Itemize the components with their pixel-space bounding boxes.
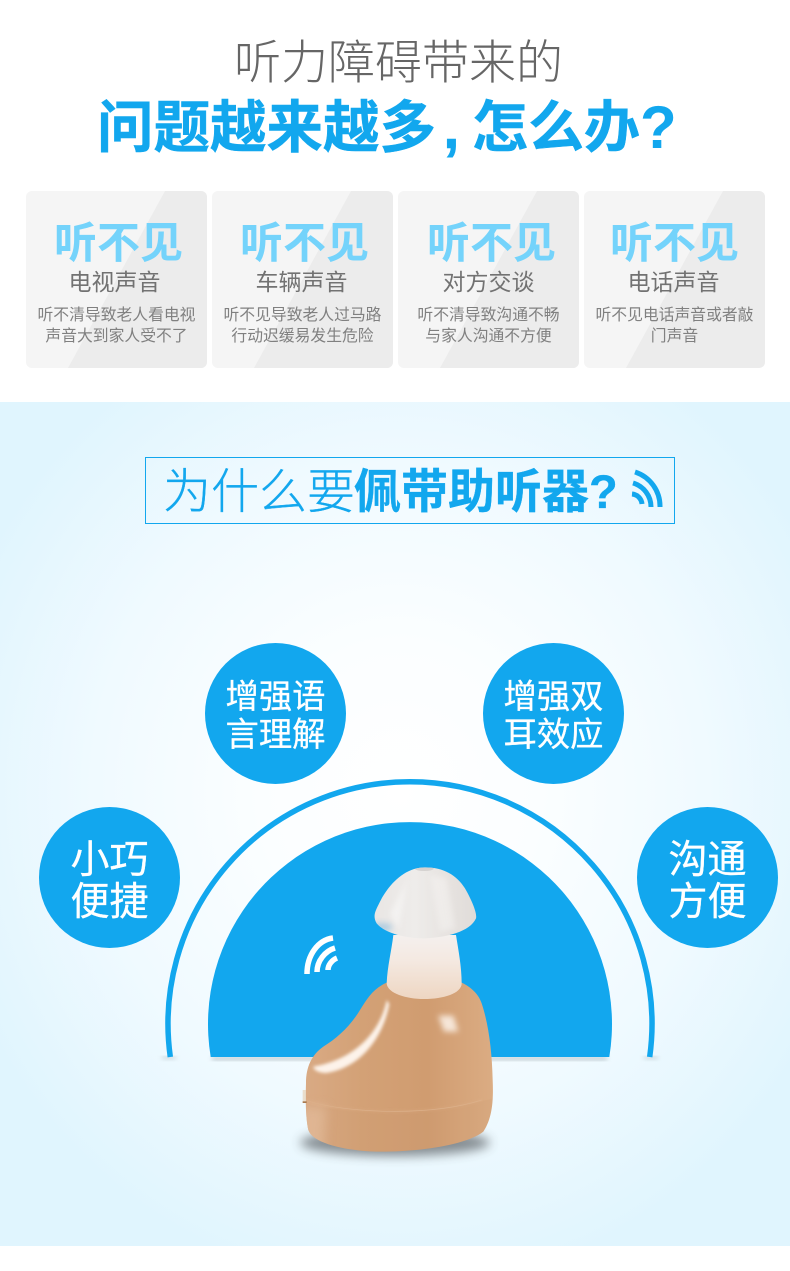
outer arch bbox=[168, 782, 652, 1057]
circle: 小巧便捷 bbox=[39, 807, 180, 948]
icon: sound waves bbox=[632, 470, 662, 507]
description: 行动迟缓易发生危险 bbox=[231, 328, 374, 345]
circle: 小巧便捷: 小巧 bbox=[70, 839, 148, 882]
dome bbox=[375, 867, 476, 938]
panel: 车辆声音 bbox=[212, 191, 393, 368]
description: 听不清导致沟通不畅 bbox=[417, 307, 560, 324]
subheading: 电话声音 bbox=[628, 269, 720, 295]
section heading text: 为什么要佩带助听器? bbox=[163, 465, 618, 519]
panel: 电视声音 bbox=[26, 191, 207, 368]
subheading: 对方交谈 bbox=[442, 269, 534, 295]
description: 与家人沟通不方便 bbox=[425, 328, 552, 345]
panel: why wear hearing aids bbox=[0, 402, 790, 1246]
title: main headline: 问题越来越多 bbox=[97, 96, 436, 159]
shadow bbox=[300, 1129, 490, 1156]
side button bbox=[303, 1090, 306, 1103]
description: 声音大到家人受不了 bbox=[45, 328, 188, 345]
heading: 听不见 bbox=[427, 220, 556, 268]
description: 听不见电话声音或者敲 bbox=[596, 307, 753, 324]
section heading box bbox=[145, 457, 675, 524]
circle: 沟通方便: 方便 bbox=[668, 881, 746, 924]
title: main headline: , bbox=[443, 94, 460, 161]
neck bbox=[387, 935, 462, 999]
description: 听不见导致老人过马路 bbox=[224, 307, 381, 324]
description bbox=[224, 306, 381, 345]
circle: 沟通方便: 沟通 bbox=[668, 839, 746, 882]
circle: 增强双耳效应: 增强双 bbox=[504, 679, 603, 716]
icon: white sound waves bbox=[307, 938, 337, 974]
panel: 对方交谈 bbox=[398, 191, 579, 368]
circle: 小巧便捷: 便捷 bbox=[70, 881, 148, 924]
subheading: 电视声音 bbox=[68, 269, 160, 295]
circle: 增强语言理解: 言理解 bbox=[226, 717, 325, 754]
circle: 增强语言理解 bbox=[205, 643, 346, 784]
panel: 电话声音 bbox=[584, 191, 765, 368]
circle: 沟通方便 bbox=[637, 807, 778, 948]
hearing aid bbox=[300, 866, 493, 1157]
description: 门声音 bbox=[651, 328, 698, 345]
description bbox=[38, 306, 195, 345]
inner blue semicircle bbox=[208, 822, 612, 1057]
description bbox=[596, 306, 753, 345]
title: main headline: ? bbox=[640, 94, 677, 161]
heading: 听不见 bbox=[240, 220, 369, 268]
dome highlights bbox=[371, 866, 455, 932]
circle: 增强双耳效应 bbox=[483, 643, 624, 784]
right highlight bbox=[438, 1016, 458, 1032]
heading: 听不见 bbox=[610, 220, 739, 268]
title: main headline bbox=[97, 94, 677, 161]
title: main headline: 怎么办 bbox=[472, 96, 640, 159]
title: first line: 听力障碍带来的 bbox=[234, 36, 563, 89]
circle: 增强语言理解: 增强语 bbox=[226, 679, 325, 716]
circle: 增强双耳效应: 耳效应 bbox=[504, 717, 603, 754]
heading: 听不见 bbox=[54, 220, 183, 268]
platform shadow bbox=[162, 1056, 658, 1061]
body bbox=[306, 983, 493, 1152]
left highlight bbox=[313, 1000, 389, 1073]
description: 听不清导致老人看电视 bbox=[38, 307, 195, 324]
subheading: 车辆声音 bbox=[256, 269, 348, 295]
body shading bbox=[300, 1000, 493, 1157]
body seam bbox=[307, 1100, 482, 1111]
description bbox=[417, 306, 560, 345]
diagram: arch, platform and hearing aid bbox=[162, 779, 658, 1164]
